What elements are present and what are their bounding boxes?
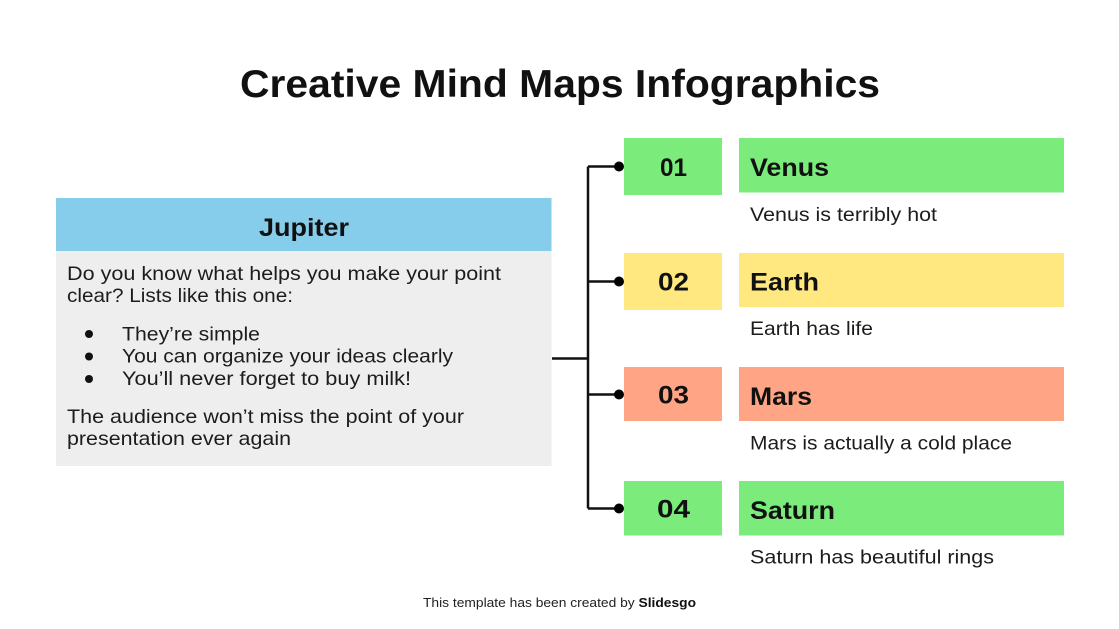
name bar Venus — [739, 138, 1064, 192]
closing paragraph: presentation ever again — [67, 428, 291, 450]
description Earth: Earth has life — [750, 318, 873, 340]
item 02: Earth — [624, 253, 1064, 340]
Jupiter body background — [56, 251, 552, 466]
description Mars: Mars is actually a cold place — [750, 432, 1012, 454]
Jupiter header bar — [56, 198, 552, 251]
number box 01 — [624, 138, 722, 195]
number 01: 01 — [660, 154, 687, 182]
panel: Jupiter — [56, 198, 552, 466]
closing paragraph: The audience won’t miss the point of your — [67, 406, 465, 428]
footer credit: This template has been created by Slidesgo — [423, 596, 696, 610]
closing paragraph — [67, 406, 465, 450]
title: Creative Mind Maps Infographics — [240, 63, 880, 106]
intro paragraph: Do you know what helps you make your point — [67, 263, 502, 285]
number 04: 04 — [657, 496, 690, 524]
name bar Saturn — [739, 481, 1064, 536]
name Saturn: Saturn — [750, 497, 835, 525]
description Venus: Venus is terribly hot — [750, 204, 938, 226]
number box 04 — [624, 481, 722, 536]
intro paragraph — [67, 263, 502, 307]
number 03: 03 — [658, 382, 689, 410]
number box 02 — [624, 253, 722, 310]
Jupiter heading: Jupiter — [259, 214, 349, 242]
name Mars: Mars — [750, 383, 812, 411]
name bar Earth — [739, 253, 1064, 307]
item 04: Saturn — [624, 481, 1064, 568]
connector tree — [552, 162, 624, 514]
description Saturn: Saturn has beautiful rings — [750, 546, 994, 568]
bullet list — [85, 324, 453, 390]
name Earth: Earth — [750, 268, 819, 296]
bullet list: They’re simple — [122, 324, 260, 346]
item 03: Mars — [624, 367, 1064, 454]
bullet list: You’ll never forget to buy milk! — [122, 368, 411, 390]
name bar Mars — [739, 367, 1064, 421]
number box 03 — [624, 367, 722, 421]
bullet list: You can organize your ideas clearly — [122, 346, 453, 368]
item 01: Venus — [624, 138, 1064, 226]
intro paragraph: clear? Lists like this one: — [67, 285, 293, 307]
name Venus: Venus — [750, 154, 829, 182]
number 02: 02 — [658, 268, 689, 296]
